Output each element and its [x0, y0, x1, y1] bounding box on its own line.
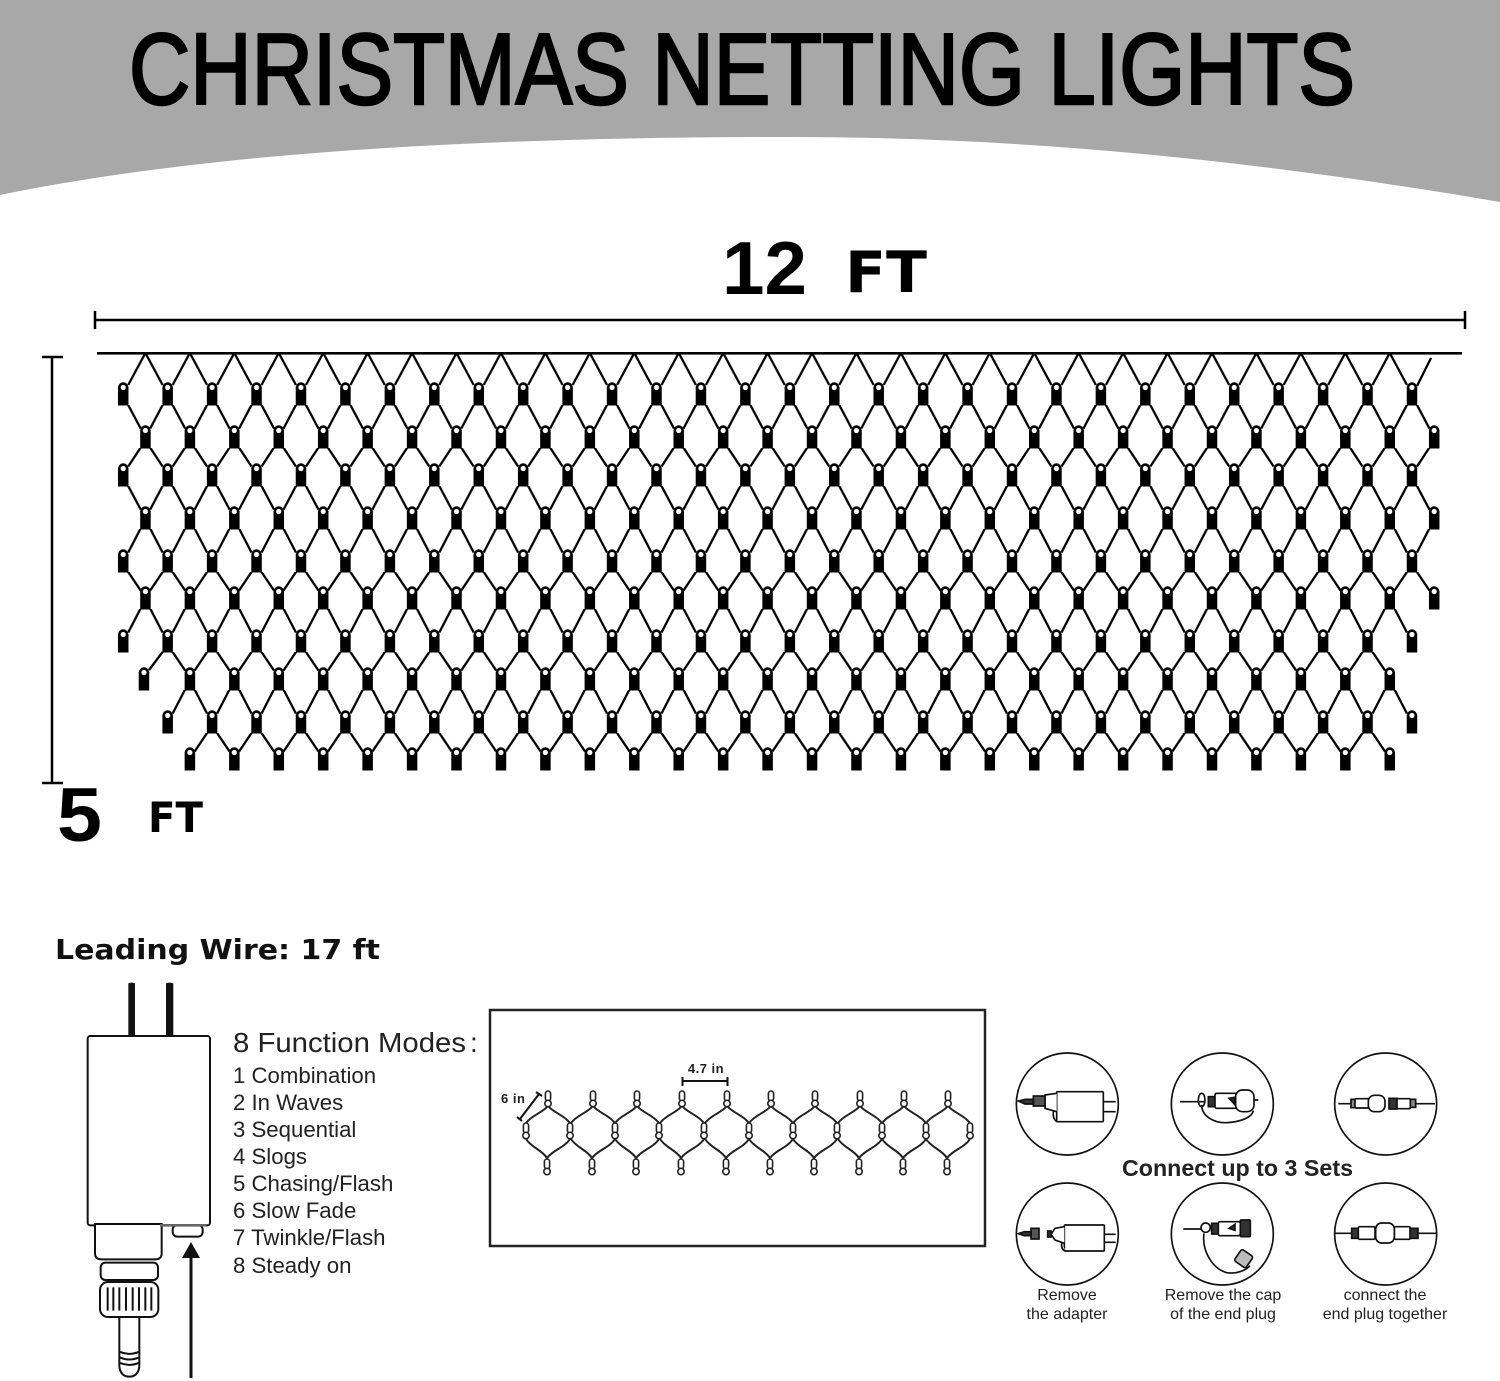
width dimension line	[95, 311, 1465, 329]
icon: adapter attached	[1016, 1053, 1118, 1155]
4.7 in dimension	[682, 1061, 728, 1086]
caption: remove the cap: of the end plug	[1170, 1306, 1276, 1323]
function modes list: 5 Chasing/Flash	[233, 1171, 393, 1196]
function modes list: 4 Slogs	[233, 1144, 307, 1169]
top support wire	[97, 352, 1462, 355]
caption: connect the end plug: connect the	[1344, 1287, 1426, 1304]
function modes list: 8 Function Modes	[233, 1027, 466, 1058]
6 in dimension: 6 in	[501, 1091, 525, 1106]
spacing net	[523, 1091, 973, 1175]
icon: end plug cap removed	[1171, 1183, 1273, 1285]
icon: end plugs connected	[1335, 1183, 1437, 1285]
icon: end plug with cap on	[1171, 1053, 1273, 1155]
caption: connect the end plug	[1323, 1287, 1448, 1323]
4.7 in dimension: 4.7 in	[688, 1061, 724, 1076]
connect up to 3 sets label: Connect up to 3 Sets	[1122, 1155, 1353, 1181]
width label: 12 FT: 12	[722, 226, 807, 310]
function modes list: 1 Combination	[233, 1063, 376, 1088]
arrow: mode button pointer	[182, 1242, 200, 1378]
height dimension line	[42, 357, 63, 783]
icon: adapter removed	[1016, 1183, 1118, 1285]
caption: remove the adapter: Remove	[1037, 1287, 1097, 1304]
bulbs	[101, 382, 1456, 771]
caption: remove the cap	[1165, 1287, 1281, 1323]
width label: 12 FT: FT	[845, 240, 927, 306]
height label: 5 FT: FT	[148, 793, 203, 842]
header band	[0, 0, 1500, 202]
net light diagram	[97, 352, 1462, 771]
icon: controller plug	[88, 983, 210, 1377]
caption: remove the adapter: the adapter	[1027, 1306, 1108, 1323]
height label: 5 FT: 5	[57, 773, 102, 858]
height label: 5 FT	[57, 773, 203, 858]
6 in dimension	[501, 1091, 542, 1121]
function modes list: :	[470, 1027, 478, 1058]
function modes list: 8 Steady on	[233, 1253, 351, 1278]
icon: end plug pair separated	[1335, 1053, 1437, 1155]
caption: connect the end plug: end plug together	[1323, 1306, 1448, 1323]
function modes list: 2 In Waves	[233, 1090, 343, 1115]
net wires	[123, 353, 1434, 752]
function modes list: 6 Slow Fade	[233, 1198, 356, 1223]
function modes list	[233, 1027, 478, 1278]
caption: remove the adapter	[1027, 1287, 1108, 1323]
width label: 12 FT	[722, 226, 927, 310]
caption: remove the cap: Remove the cap	[1165, 1287, 1281, 1304]
leading wire label: Leading Wire: 17 ft	[55, 933, 380, 966]
panel: bulb spacing detail	[490, 1010, 985, 1246]
function modes list: 3 Sequential	[233, 1117, 356, 1142]
function modes list: 7 Twinkle/Flash	[233, 1225, 386, 1250]
